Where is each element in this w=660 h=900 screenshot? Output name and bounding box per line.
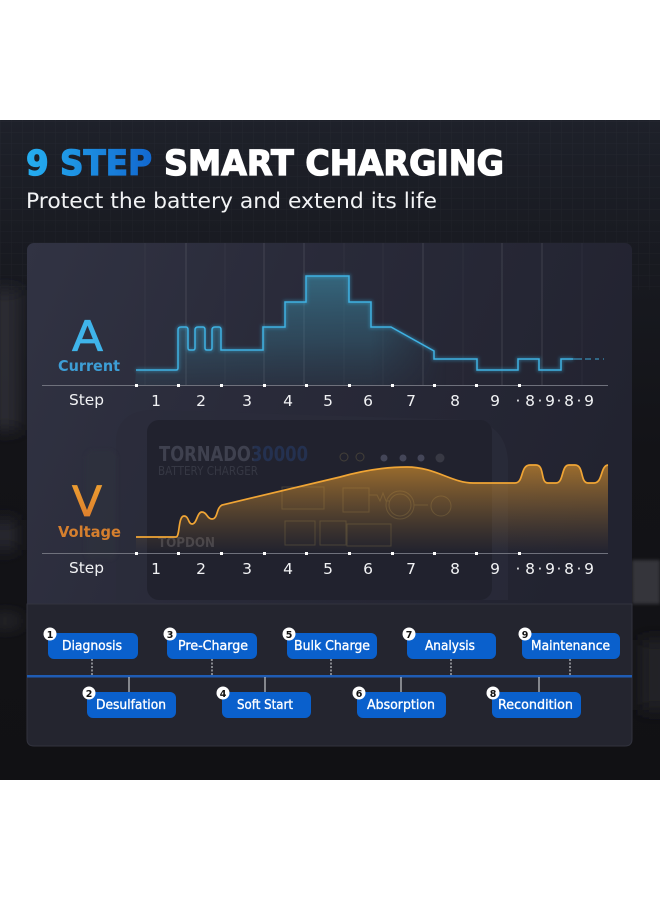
current label (58, 312, 120, 375)
current step axis: 8 (450, 392, 460, 410)
step 7 Analysis: Analysis (425, 638, 475, 654)
voltage step axis: · (516, 560, 520, 578)
step 5 Bulk Charge: Bulk Charge (294, 638, 370, 654)
step 1 Diagnosis: Diagnosis (62, 638, 122, 654)
panel: step timeline (27, 604, 632, 746)
current chart (135, 276, 608, 385)
step 5 Bulk Charge: 5 (286, 630, 292, 641)
step 3 Pre-Charge (164, 628, 257, 659)
current step axis: 8 (564, 392, 574, 410)
charger photo: TORNADO30000 (159, 442, 308, 466)
step 4 Soft Start (216, 686, 311, 718)
voltage step axis: 9 (490, 560, 500, 578)
step 3 Pre-Charge: Pre-Charge (178, 638, 248, 654)
voltage step axis: · (557, 560, 561, 578)
voltage step axis: · (577, 560, 581, 578)
current step axis: 1 (151, 392, 161, 410)
step 9 Maintenance: Maintenance (531, 638, 610, 654)
current step axis: 9 (545, 392, 555, 410)
step 8 Recondition: Recondition (498, 697, 573, 713)
step 5 Bulk Charge (282, 628, 377, 659)
subtitle: Protect the battery and extend its life (26, 189, 437, 213)
voltage step axis: 8 (525, 560, 535, 578)
voltage step axis (42, 552, 608, 578)
current step axis: 2 (196, 392, 206, 410)
step 8 Recondition: 8 (490, 689, 497, 700)
current step axis: 7 (406, 392, 416, 410)
step 1 Diagnosis: 1 (47, 630, 53, 641)
step 6 Absorption: Absorption (367, 697, 435, 713)
current step axis: · (538, 392, 542, 410)
charger photo: TOPDON (158, 536, 215, 551)
voltage step axis: 9 (545, 560, 555, 578)
voltage label (58, 477, 121, 541)
title: 9 STEP (26, 144, 152, 184)
voltage step axis: 3 (242, 560, 252, 578)
step 4 Soft Start: 4 (220, 689, 227, 700)
voltage chart (136, 465, 608, 553)
dark photo background (0, 120, 660, 780)
current step axis: · (516, 392, 520, 410)
current step axis (42, 384, 608, 410)
step 9 Maintenance: 9 (522, 630, 528, 641)
step 2 Desulfation (82, 686, 176, 718)
current step axis: · (577, 392, 581, 410)
voltage step axis: 8 (564, 560, 574, 578)
infographic: 9 step smart charging (0, 120, 660, 780)
current step axis: · (557, 392, 561, 410)
current step axis: 6 (363, 392, 373, 410)
charger photo (147, 420, 452, 600)
voltage label: V (72, 477, 102, 526)
voltage step axis: 4 (283, 560, 293, 578)
voltage step axis: 5 (323, 560, 333, 578)
step 8 Recondition (486, 686, 581, 718)
step 1 Diagnosis (44, 628, 138, 659)
voltage step axis: 8 (450, 560, 460, 578)
step 3 Pre-Charge: 3 (167, 630, 173, 641)
panel: charts (27, 243, 632, 746)
step 6 Absorption (352, 686, 446, 718)
current step axis: 8 (525, 392, 535, 410)
step 7 Analysis: 7 (406, 630, 412, 641)
voltage step axis: 6 (363, 560, 373, 578)
voltage label: Voltage (58, 523, 121, 541)
voltage step axis: 1 (151, 560, 161, 578)
step 9 Maintenance (518, 628, 620, 659)
current step axis: 9 (584, 392, 594, 410)
current step axis: 9 (490, 392, 500, 410)
current step axis: 4 (283, 392, 293, 410)
timeline line (27, 675, 632, 678)
current step axis: Step (69, 391, 104, 409)
voltage step axis: 2 (196, 560, 206, 578)
current label: A (72, 312, 103, 361)
voltage step axis: 7 (406, 560, 416, 578)
current step axis: 3 (242, 392, 252, 410)
voltage step axis: · (538, 560, 542, 578)
voltage step axis: 9 (584, 560, 594, 578)
voltage step axis: Step (69, 559, 104, 577)
step 2 Desulfation: Desulfation (96, 697, 166, 713)
current label: Current (58, 357, 120, 375)
step 7 Analysis (402, 628, 496, 659)
step 6 Absorption: 6 (356, 689, 363, 700)
title: SMART CHARGING (164, 144, 504, 184)
step 2 Desulfation: 2 (86, 689, 92, 700)
title (26, 144, 504, 184)
step 4 Soft Start: Soft Start (237, 697, 293, 713)
step grid lines (145, 243, 582, 385)
charger photo: BATTERY CHARGER (158, 464, 258, 478)
current step axis: 5 (323, 392, 333, 410)
